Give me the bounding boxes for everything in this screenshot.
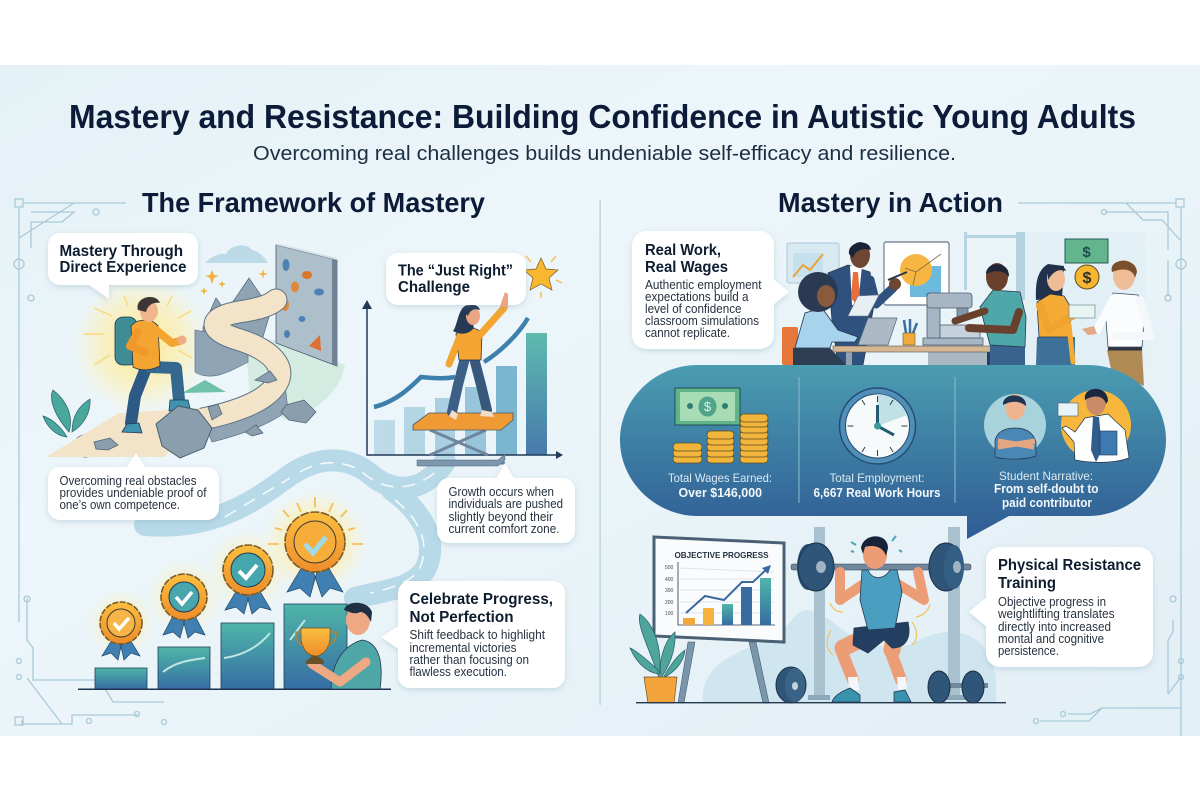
dollar coin bbox=[1075, 265, 1099, 289]
subtitle: Overcoming real challenges builds undeniable self-efficacy and resilience. bbox=[253, 143, 956, 165]
light wall bbox=[1025, 232, 1145, 365]
woman bbox=[449, 305, 504, 420]
thighs bbox=[843, 632, 895, 650]
lower path wedge bbox=[46, 408, 200, 457]
badge 2 bbox=[146, 559, 222, 638]
step arrows bbox=[163, 620, 305, 672]
heading: framework: The Framework of Mastery bbox=[142, 187, 485, 218]
glow behind hiker bbox=[72, 275, 212, 415]
callout: just right bbox=[386, 253, 526, 305]
chart axes bbox=[367, 304, 560, 455]
callout: celebrate progress: rather than focusing on bbox=[410, 653, 529, 667]
dollar coin: $ bbox=[1083, 270, 1092, 287]
text: total wages bbox=[668, 471, 772, 500]
icon: clock bbox=[840, 388, 916, 464]
trend arrowhead bbox=[762, 565, 771, 574]
baseline bbox=[78, 688, 391, 690]
rack feet bbox=[808, 695, 966, 700]
shoes bbox=[832, 688, 911, 702]
squatting athlete bbox=[827, 536, 930, 702]
backpack bbox=[115, 317, 137, 365]
sweat drops bbox=[851, 536, 902, 552]
climbing wall bbox=[276, 244, 337, 366]
callout: overcoming obstacles: one’s own competence. bbox=[60, 498, 180, 512]
text: total employment: Total Employment: bbox=[830, 471, 924, 485]
potted plant bbox=[630, 614, 685, 703]
hair bbox=[861, 536, 888, 556]
axis labels: 300 bbox=[665, 588, 674, 594]
progress board bbox=[654, 537, 784, 703]
head bbox=[140, 300, 158, 322]
arms bbox=[840, 572, 924, 600]
text: student narrative: From self-doubt to bbox=[994, 482, 1099, 496]
text: student narrative bbox=[994, 469, 1099, 510]
torso bbox=[131, 320, 160, 370]
sparkles bbox=[200, 269, 268, 295]
axis labels bbox=[665, 565, 674, 617]
badge 3 bbox=[206, 528, 290, 614]
staircase of badges bbox=[78, 490, 391, 690]
growth curve bbox=[374, 318, 528, 407]
small chart board bbox=[787, 243, 839, 283]
callout: celebrate progress: Not Perfection bbox=[410, 609, 514, 626]
shins bbox=[841, 650, 901, 680]
desk bbox=[833, 346, 1003, 365]
callout: direct experience: Direct Experience bbox=[60, 259, 187, 276]
dollar bill: $ bbox=[1082, 244, 1091, 261]
callout: growth: slightly beyond their bbox=[448, 510, 553, 524]
yellow shirt woman bbox=[1036, 264, 1075, 365]
callout: celebrate progress bbox=[381, 581, 565, 688]
callout: just right: The “Just Right” bbox=[398, 262, 513, 280]
star with rays bbox=[520, 256, 562, 298]
small rocks bbox=[94, 371, 316, 450]
pencil cup bbox=[903, 319, 917, 345]
trend line bbox=[686, 568, 768, 613]
background blob bbox=[703, 610, 996, 702]
callout: growth: individuals are pushed bbox=[448, 497, 563, 511]
dollar bill bbox=[1065, 239, 1108, 263]
text: total wages: Total Wages Earned: bbox=[668, 471, 772, 485]
icon: student before bbox=[984, 394, 1046, 459]
mountain rocks bbox=[203, 278, 272, 340]
bar 2 bbox=[703, 608, 714, 625]
callout: celebrate progress: incremental victories bbox=[410, 641, 516, 655]
callout: physical resistance: persistence. bbox=[998, 644, 1059, 658]
hand bbox=[178, 336, 186, 344]
callout: physical resistance: Training bbox=[998, 575, 1056, 592]
callout: overcoming obstacles: provides undeniable proof of bbox=[60, 486, 207, 500]
room background bbox=[964, 232, 1025, 300]
tank top bbox=[860, 570, 902, 630]
laptop bbox=[858, 318, 897, 345]
white shirt man bbox=[1082, 260, 1150, 386]
callout: growth: Growth occurs when bbox=[448, 485, 554, 499]
icon: paid contributor bbox=[1058, 389, 1131, 462]
chart axis bbox=[678, 562, 775, 625]
axis labels: 500 bbox=[665, 565, 674, 571]
icon: money and coins: $ bbox=[704, 399, 712, 414]
center divider bbox=[600, 200, 601, 705]
panel dividers bbox=[799, 377, 955, 503]
callout: direct experience: Mastery Through bbox=[60, 243, 183, 260]
hair bbox=[138, 297, 160, 312]
person with trophy bbox=[296, 603, 381, 689]
step bars bbox=[95, 604, 347, 689]
hiker bbox=[115, 297, 190, 433]
lift base bbox=[417, 454, 505, 466]
head bbox=[863, 541, 887, 569]
barbell bbox=[791, 543, 971, 591]
callout: physical resistance: weightlifting translates bbox=[997, 607, 1114, 621]
boulder bbox=[156, 406, 212, 458]
axis labels: 400 bbox=[665, 577, 674, 583]
green ground bbox=[245, 340, 345, 420]
machine bbox=[923, 293, 983, 345]
illustration: real work scene bbox=[782, 232, 1150, 386]
chart bars bbox=[374, 333, 547, 455]
callout: celebrate progress: flawless execution. bbox=[410, 665, 507, 679]
callout: physical resistance bbox=[969, 547, 1153, 667]
callout: overcoming obstacles: Overcoming real obstacles bbox=[60, 474, 196, 488]
arm back bbox=[130, 332, 145, 352]
icon: money and coins bbox=[673, 388, 768, 463]
scissor lift bbox=[417, 430, 505, 463]
circuit decoration: right bbox=[1018, 199, 1186, 736]
suit man bbox=[828, 242, 907, 365]
callout: real work: cannot replicate. bbox=[645, 326, 730, 340]
plant bbox=[43, 390, 90, 437]
progress board: OBJECTIVE PROGRESS bbox=[674, 550, 769, 560]
badge 4 bbox=[263, 490, 367, 597]
callout: real work: level of confidence bbox=[645, 302, 742, 316]
chart gridlines bbox=[680, 568, 774, 613]
callout: direct experience bbox=[48, 233, 198, 299]
heading: action: Mastery in Action bbox=[778, 187, 1003, 218]
chart: just right challenge bbox=[362, 256, 563, 466]
winding road bbox=[145, 460, 445, 598]
boots bbox=[122, 400, 190, 433]
callout: growth bbox=[437, 463, 575, 543]
easel legs bbox=[678, 642, 769, 703]
axis labels: 100 bbox=[665, 611, 674, 617]
winding path outline bbox=[85, 300, 280, 446]
bar 5 bbox=[760, 578, 771, 625]
callout: real work: Real Work, bbox=[645, 242, 721, 259]
text: student narrative: paid contributor bbox=[1002, 496, 1092, 510]
text: student narrative: Student Narrative: bbox=[999, 469, 1093, 483]
whiteboard bbox=[884, 242, 949, 305]
floor weight plate bbox=[776, 667, 806, 703]
chair bbox=[782, 327, 798, 365]
badge 1 bbox=[87, 589, 155, 660]
callout: real work: Real Wages bbox=[645, 259, 728, 276]
callout: just right: Challenge bbox=[398, 279, 470, 296]
text: total employment: 6,667 Real Work Hours bbox=[814, 486, 941, 500]
socks bbox=[848, 677, 907, 690]
pointing hand overlapping callout bbox=[500, 292, 508, 308]
bar 4 bbox=[741, 587, 752, 625]
bar 1 bbox=[683, 618, 695, 625]
callout: real work bbox=[632, 231, 789, 349]
glow rays bbox=[84, 296, 192, 365]
text: total wages: Over $146,000 bbox=[678, 486, 762, 500]
callout: real work: classroom simulations bbox=[645, 314, 759, 328]
callout: celebrate progress: Celebrate Progress, bbox=[410, 591, 553, 608]
text: total employment bbox=[814, 471, 941, 500]
green patch under path bbox=[182, 380, 226, 393]
callout: growth: current comfort zone. bbox=[448, 522, 560, 536]
path retaining walls bbox=[195, 330, 288, 442]
shorts bbox=[853, 622, 909, 653]
axis labels: 200 bbox=[665, 600, 674, 606]
paycheck bbox=[1069, 305, 1095, 318]
callout: physical resistance: directly into increased bbox=[998, 620, 1111, 634]
cloud bbox=[205, 245, 268, 263]
motion marks bbox=[827, 603, 930, 655]
bar 3 bbox=[722, 604, 733, 625]
lift platform bbox=[413, 413, 513, 430]
callout: celebrate progress: Shift feedback to highlight bbox=[410, 628, 545, 642]
leg back bbox=[131, 368, 146, 423]
illustration: hiker on mountain path bbox=[43, 244, 345, 458]
callout: overcoming obstacles bbox=[48, 453, 219, 520]
winding path bbox=[85, 300, 280, 446]
callout: real work: Authentic employment bbox=[645, 278, 762, 292]
callout: physical resistance: Physical Resistance bbox=[998, 557, 1141, 574]
illustration: weightlifting bbox=[630, 527, 1006, 703]
pill background bbox=[620, 365, 1166, 539]
callout: physical resistance: Objective progress in bbox=[998, 595, 1106, 609]
callout: physical resistance: montal and cognitive bbox=[998, 632, 1104, 646]
teal shirt man bbox=[955, 263, 1026, 365]
arm front bbox=[156, 330, 180, 343]
seated woman bbox=[793, 272, 858, 365]
leg front bbox=[150, 367, 179, 400]
axis arrowheads bbox=[362, 300, 563, 459]
title: Mastery and Resistance: Building Confidence in Autistic Young Adults bbox=[69, 98, 1136, 135]
callout: real work: expectations build a bbox=[645, 290, 749, 304]
dumbbell bbox=[928, 671, 988, 703]
rack posts bbox=[814, 527, 960, 698]
circuit decoration: left bbox=[14, 199, 166, 725]
floor line bbox=[636, 702, 1006, 703]
stats panel bbox=[620, 365, 1166, 539]
